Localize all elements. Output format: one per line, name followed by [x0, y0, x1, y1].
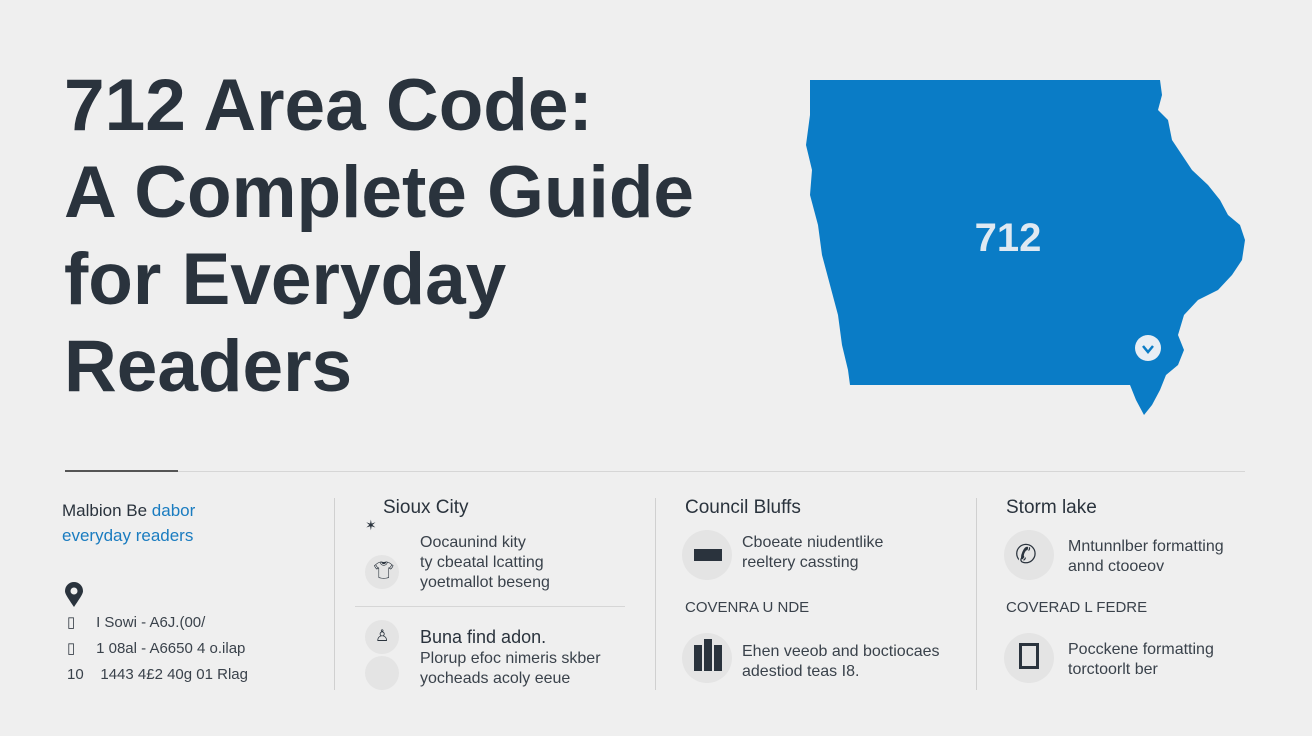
panel: intro [62, 501, 248, 683]
text [420, 627, 601, 687]
icon [365, 555, 399, 589]
title [64, 65, 694, 407]
title: A Complete Guide [64, 152, 694, 233]
panel: Sioux City [355, 497, 625, 690]
text: Plorup efoc nimeris skber [420, 650, 601, 667]
divider [65, 471, 1245, 472]
panel: Council Bluffs: adestiod teas I8. [742, 663, 859, 680]
list [67, 614, 248, 683]
panel: Council Bluffs [682, 497, 939, 683]
list: ▯ I Sowi - A6J.(00/ [67, 614, 205, 631]
panel: Storm lake: Mntunnlber formatting [1068, 538, 1224, 555]
intro heading [62, 501, 195, 545]
panel: Council Bluffs: Cboeate niudentlike [742, 534, 883, 551]
subheading: COVENRA U NDE [685, 599, 809, 616]
intro heading: everyday readers [62, 526, 193, 545]
title: Readers [64, 326, 352, 407]
heading: Sioux City [383, 497, 469, 518]
subheading: COVERAD L FEDRE [1006, 599, 1147, 616]
title: 712 Area Code: [64, 65, 593, 146]
list: 10 1443 4£2 40g 01 Rlag [67, 666, 248, 683]
panel: Sioux City: 👕︎ [373, 561, 395, 580]
panel: Storm lake: Pocckene formatting [1068, 641, 1214, 658]
intro heading: Malbion Be dabor [62, 501, 195, 520]
text: ty cbeatal lcatting [420, 554, 544, 571]
icon: pin [65, 582, 83, 607]
panel: Storm lake: torctoorlt ber [1068, 661, 1158, 678]
panel: Sioux City: ✶ [365, 517, 377, 533]
panel: Sioux City: ♙ [375, 628, 389, 645]
panel: Council Bluffs: Ehen veeob and boctiocaes [742, 643, 939, 660]
text: Buna find adon. [420, 627, 546, 647]
title: for Everyday [64, 239, 506, 320]
text: yoetmallot beseng [420, 574, 550, 591]
heading: Storm lake [1006, 497, 1097, 518]
heading: Council Bluffs [685, 497, 801, 518]
list: ▯ 1 08al - A6650 4 o.ilap [67, 640, 245, 657]
text: yocheads acoly eeue [420, 670, 570, 687]
text: Oocaunind kity [420, 534, 526, 551]
panel: Storm lake [1004, 497, 1224, 683]
map: Iowa: 712 [975, 216, 1041, 260]
panel: Council Bluffs: reeltery cassting [742, 554, 858, 571]
panel: Storm lake: ✆ [1015, 539, 1037, 569]
panel: Storm lake: annd ctooeov [1068, 558, 1164, 575]
text [420, 534, 550, 591]
map: Iowa [806, 80, 1245, 415]
